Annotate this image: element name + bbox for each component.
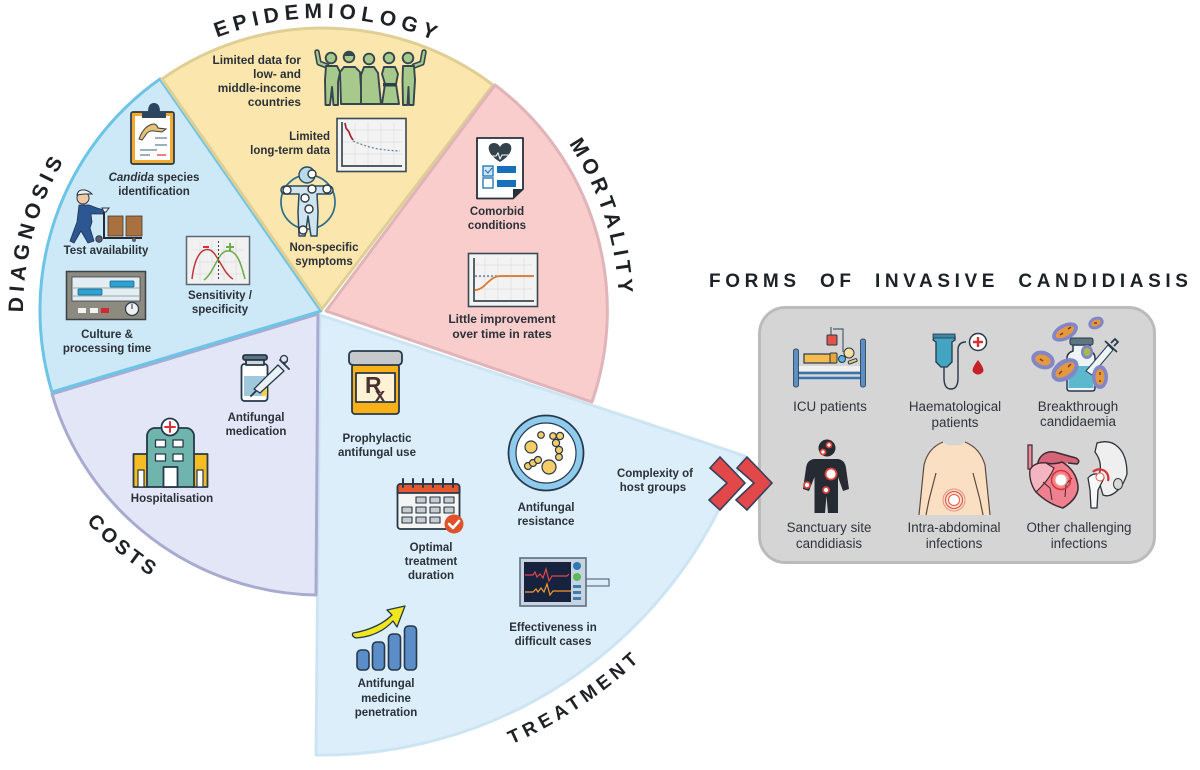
label: sanctuary site candidiasis: Sanctuary site [787, 520, 871, 535]
heading: mortality: MORTALITY [570, 137, 633, 292]
label: intra-abdominal infections: Intra-abdominal [907, 520, 1001, 535]
label: comorbid conditions: conditions [468, 220, 526, 232]
icon: sanctuary site body [803, 440, 849, 513]
arrow: double chevron [709, 457, 772, 510]
icon: icu bed [794, 327, 866, 387]
label: culture and processing time: Culture & [81, 329, 133, 341]
label: optimal treatment duration: duration [408, 570, 454, 582]
label: sensitivity specificity: specificity [192, 304, 249, 316]
label: other challenging infections: infections [1051, 536, 1108, 551]
label: antifungal medication: medication [226, 426, 286, 438]
label: limited long-term data: long-term data [250, 145, 331, 157]
label: optimal treatment duration: treatment [405, 556, 457, 568]
label: antifungal medicine penetration: medicine [361, 693, 411, 705]
label: antifungal resistance: resistance [518, 516, 574, 528]
label: candida species identification: identification [118, 186, 190, 198]
icon: blood transfusion bag [933, 334, 986, 389]
label: haematological patients: patients [932, 415, 979, 430]
icon: abdomen [919, 442, 990, 515]
label: test availability: Test availability [64, 245, 149, 257]
icon: comorbidity document [477, 138, 523, 198]
icon: vial and syringe [242, 355, 289, 401]
heading: diagnosis: DIAGNOSIS [8, 156, 62, 311]
icon: plateau chart [468, 254, 538, 306]
label: limited data for lmic: countries [248, 95, 301, 109]
icon: patient monitor [520, 558, 609, 606]
panel: epidemiology [160, 4, 494, 311]
label: antifungal medicine penetration: Antifungal [358, 678, 414, 690]
label: complexity of host groups: Complexity of [617, 468, 693, 480]
label: antifungal resistance: Antifungal [518, 502, 574, 514]
label: effectiveness in difficult cases: difficult cases [515, 636, 591, 648]
label: complexity of host groups: host groups [620, 482, 686, 494]
icon: heart and hip [1028, 442, 1127, 508]
label: antifungal medication: Antifungal [228, 412, 284, 424]
label: hospitalisation: Hospitalisation [131, 493, 213, 505]
label: intra-abdominal infections: infections [926, 536, 983, 551]
label: limited long-term data: Limited [289, 131, 330, 143]
icon: prescription bottle: x [375, 385, 385, 405]
label: icu patients: ICU patients [793, 399, 867, 414]
label: sanctuary site candidiasis: candidiasis [796, 536, 862, 551]
heading: treatment: TREATMENT [506, 652, 636, 742]
icon: sensitivity specificity chart [186, 236, 250, 284]
label: limited data for lmic: Limited data for [213, 53, 301, 67]
label: culture and processing time: processing time [63, 343, 151, 355]
label: prophylactic antifungal use: antifungal use [338, 447, 416, 459]
panel: diagnosis [8, 77, 322, 394]
icon: clipboard with candida [131, 103, 174, 164]
label: limited data for lmic: low- and [253, 67, 301, 81]
panel: costs [50, 313, 320, 596]
label: comorbid conditions: Comorbid [470, 206, 524, 218]
label: little improvement over time: Little improvement [448, 312, 556, 326]
label: haematological patients: Haematological [909, 399, 1001, 414]
heading: costs: COSTS [89, 515, 156, 574]
icon: declining chart [337, 118, 406, 172]
label: effectiveness in difficult cases: Effectiveness in [509, 622, 597, 634]
label: little improvement over time: over time in rates [452, 327, 552, 341]
icon: calendar [398, 479, 464, 534]
icon: culture machine [66, 272, 146, 320]
icon: body with symptom points [281, 167, 335, 236]
title: forms of invasive candidiasis: FORMS OF INVASIVE CANDIDIASIS [709, 271, 1193, 292]
label: sensitivity specificity: Sensitivity / [188, 290, 253, 302]
panel: mortality [324, 83, 633, 404]
label: non-specific symptoms: symptoms [295, 256, 353, 268]
label: breakthrough candidaemia: candidaemia [1040, 414, 1117, 429]
icon: rising bars and arrow [352, 606, 416, 670]
icon: prescription bottle [349, 351, 402, 414]
label: prophylactic antifungal use: Prophylactic [342, 433, 412, 445]
label: limited data for lmic: middle-income [218, 81, 301, 95]
label: antifungal medicine penetration: penetration [355, 707, 417, 719]
label: breakthrough candidaemia: Breakthrough [1038, 399, 1118, 414]
label: non-specific symptoms: Non-specific [289, 242, 359, 254]
panel: forms grey box [760, 308, 1154, 562]
label: candida species identification: Candida species [109, 172, 199, 184]
label: optimal treatment duration: Optimal [410, 542, 452, 554]
icon: hospital [134, 418, 208, 487]
icon: breakthrough candidaemia [1029, 314, 1118, 391]
icon: group of people [317, 52, 424, 105]
icon: petri dish [508, 416, 584, 490]
label: other challenging infections: Other challenging [1027, 520, 1131, 535]
icon: worker with trolley [70, 190, 142, 243]
icon: prescription bottle: R [365, 372, 382, 398]
heading: epidemiology: EPIDEMIOLOGY [214, 4, 438, 38]
panel: treatment [314, 314, 746, 756]
